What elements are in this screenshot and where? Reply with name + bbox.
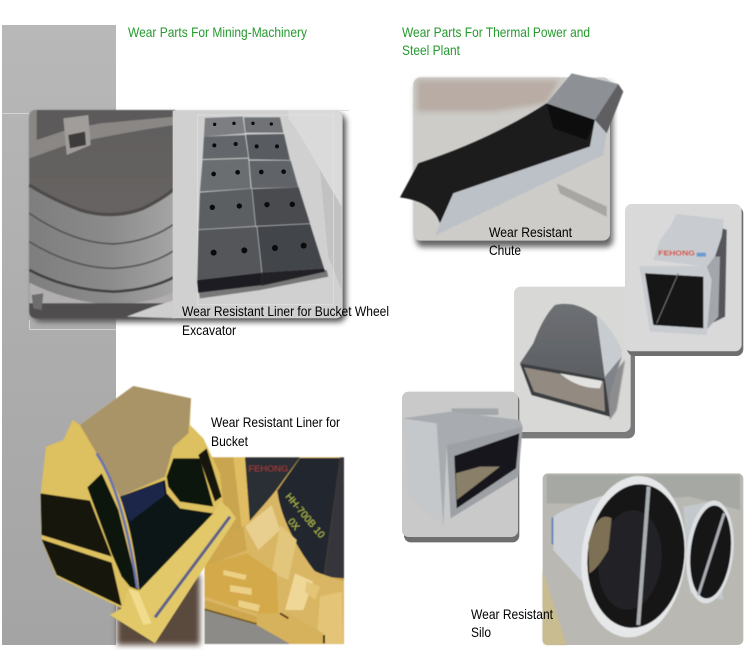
photo: bucket teeth close-up: 0X	[285, 517, 302, 533]
panel: wear resistant chute	[400, 73, 623, 258]
panel: bucket wheel excavator liner	[29, 110, 389, 338]
photo: silo backdrop	[543, 473, 743, 645]
caption: silo: Wear Resistant	[471, 606, 553, 622]
caption: bucket liner	[211, 414, 340, 449]
panel: square duct with logo	[625, 204, 743, 356]
photo: bucket teeth close-up: FEHONG	[248, 465, 288, 474]
caption: bucket liner: Bucket	[211, 433, 248, 449]
photo: chute backdrop	[413, 77, 610, 241]
caption: silo: Silo	[471, 624, 491, 640]
icon: square duct: FEHONG	[658, 249, 695, 258]
icon: silo cylinders	[552, 471, 739, 643]
heading: thermal power and steel plant	[402, 24, 590, 58]
icon: tapered duct	[520, 304, 625, 420]
panel: rectangular box duct	[402, 392, 523, 542]
caption: silo	[471, 606, 553, 640]
heading: thermal power and steel plant: Wear Parts For Thermal Power and	[402, 24, 590, 40]
photo: cardboard behind bucket	[117, 575, 200, 645]
caption: chute: Wear Resistant	[489, 224, 572, 240]
photo: bucket teeth close-up	[205, 457, 344, 644]
photo: bucket teeth close-up: HH-700B 10	[283, 492, 327, 541]
heading: mining machinery: Wear Parts For Mining-Machinery	[128, 24, 307, 40]
photo: perforated wear plates	[173, 111, 343, 318]
heading: thermal power and steel plant: Steel Plant	[402, 42, 460, 58]
icon: yellow loader bucket	[41, 386, 236, 643]
panel: loader bucket liner	[41, 386, 344, 645]
panel: tapered duct	[514, 287, 635, 438]
icon: square duct	[639, 214, 727, 335]
caption: chute: Chute	[489, 242, 521, 258]
grey background band	[2, 25, 116, 645]
panel: wear resistant silo	[471, 471, 743, 645]
icon: chute	[400, 73, 623, 236]
icon: box duct	[403, 408, 523, 527]
caption: bucket wheel liner: Excavator	[182, 322, 236, 338]
photo: curved excavator liner	[29, 110, 176, 318]
caption: bucket liner: Wear Resistant Liner for	[211, 414, 340, 430]
caption: bucket wheel liner	[182, 303, 389, 338]
caption: chute	[489, 224, 572, 258]
caption: bucket wheel liner: Wear Resistant Liner for Bucket Wheel	[182, 303, 389, 319]
